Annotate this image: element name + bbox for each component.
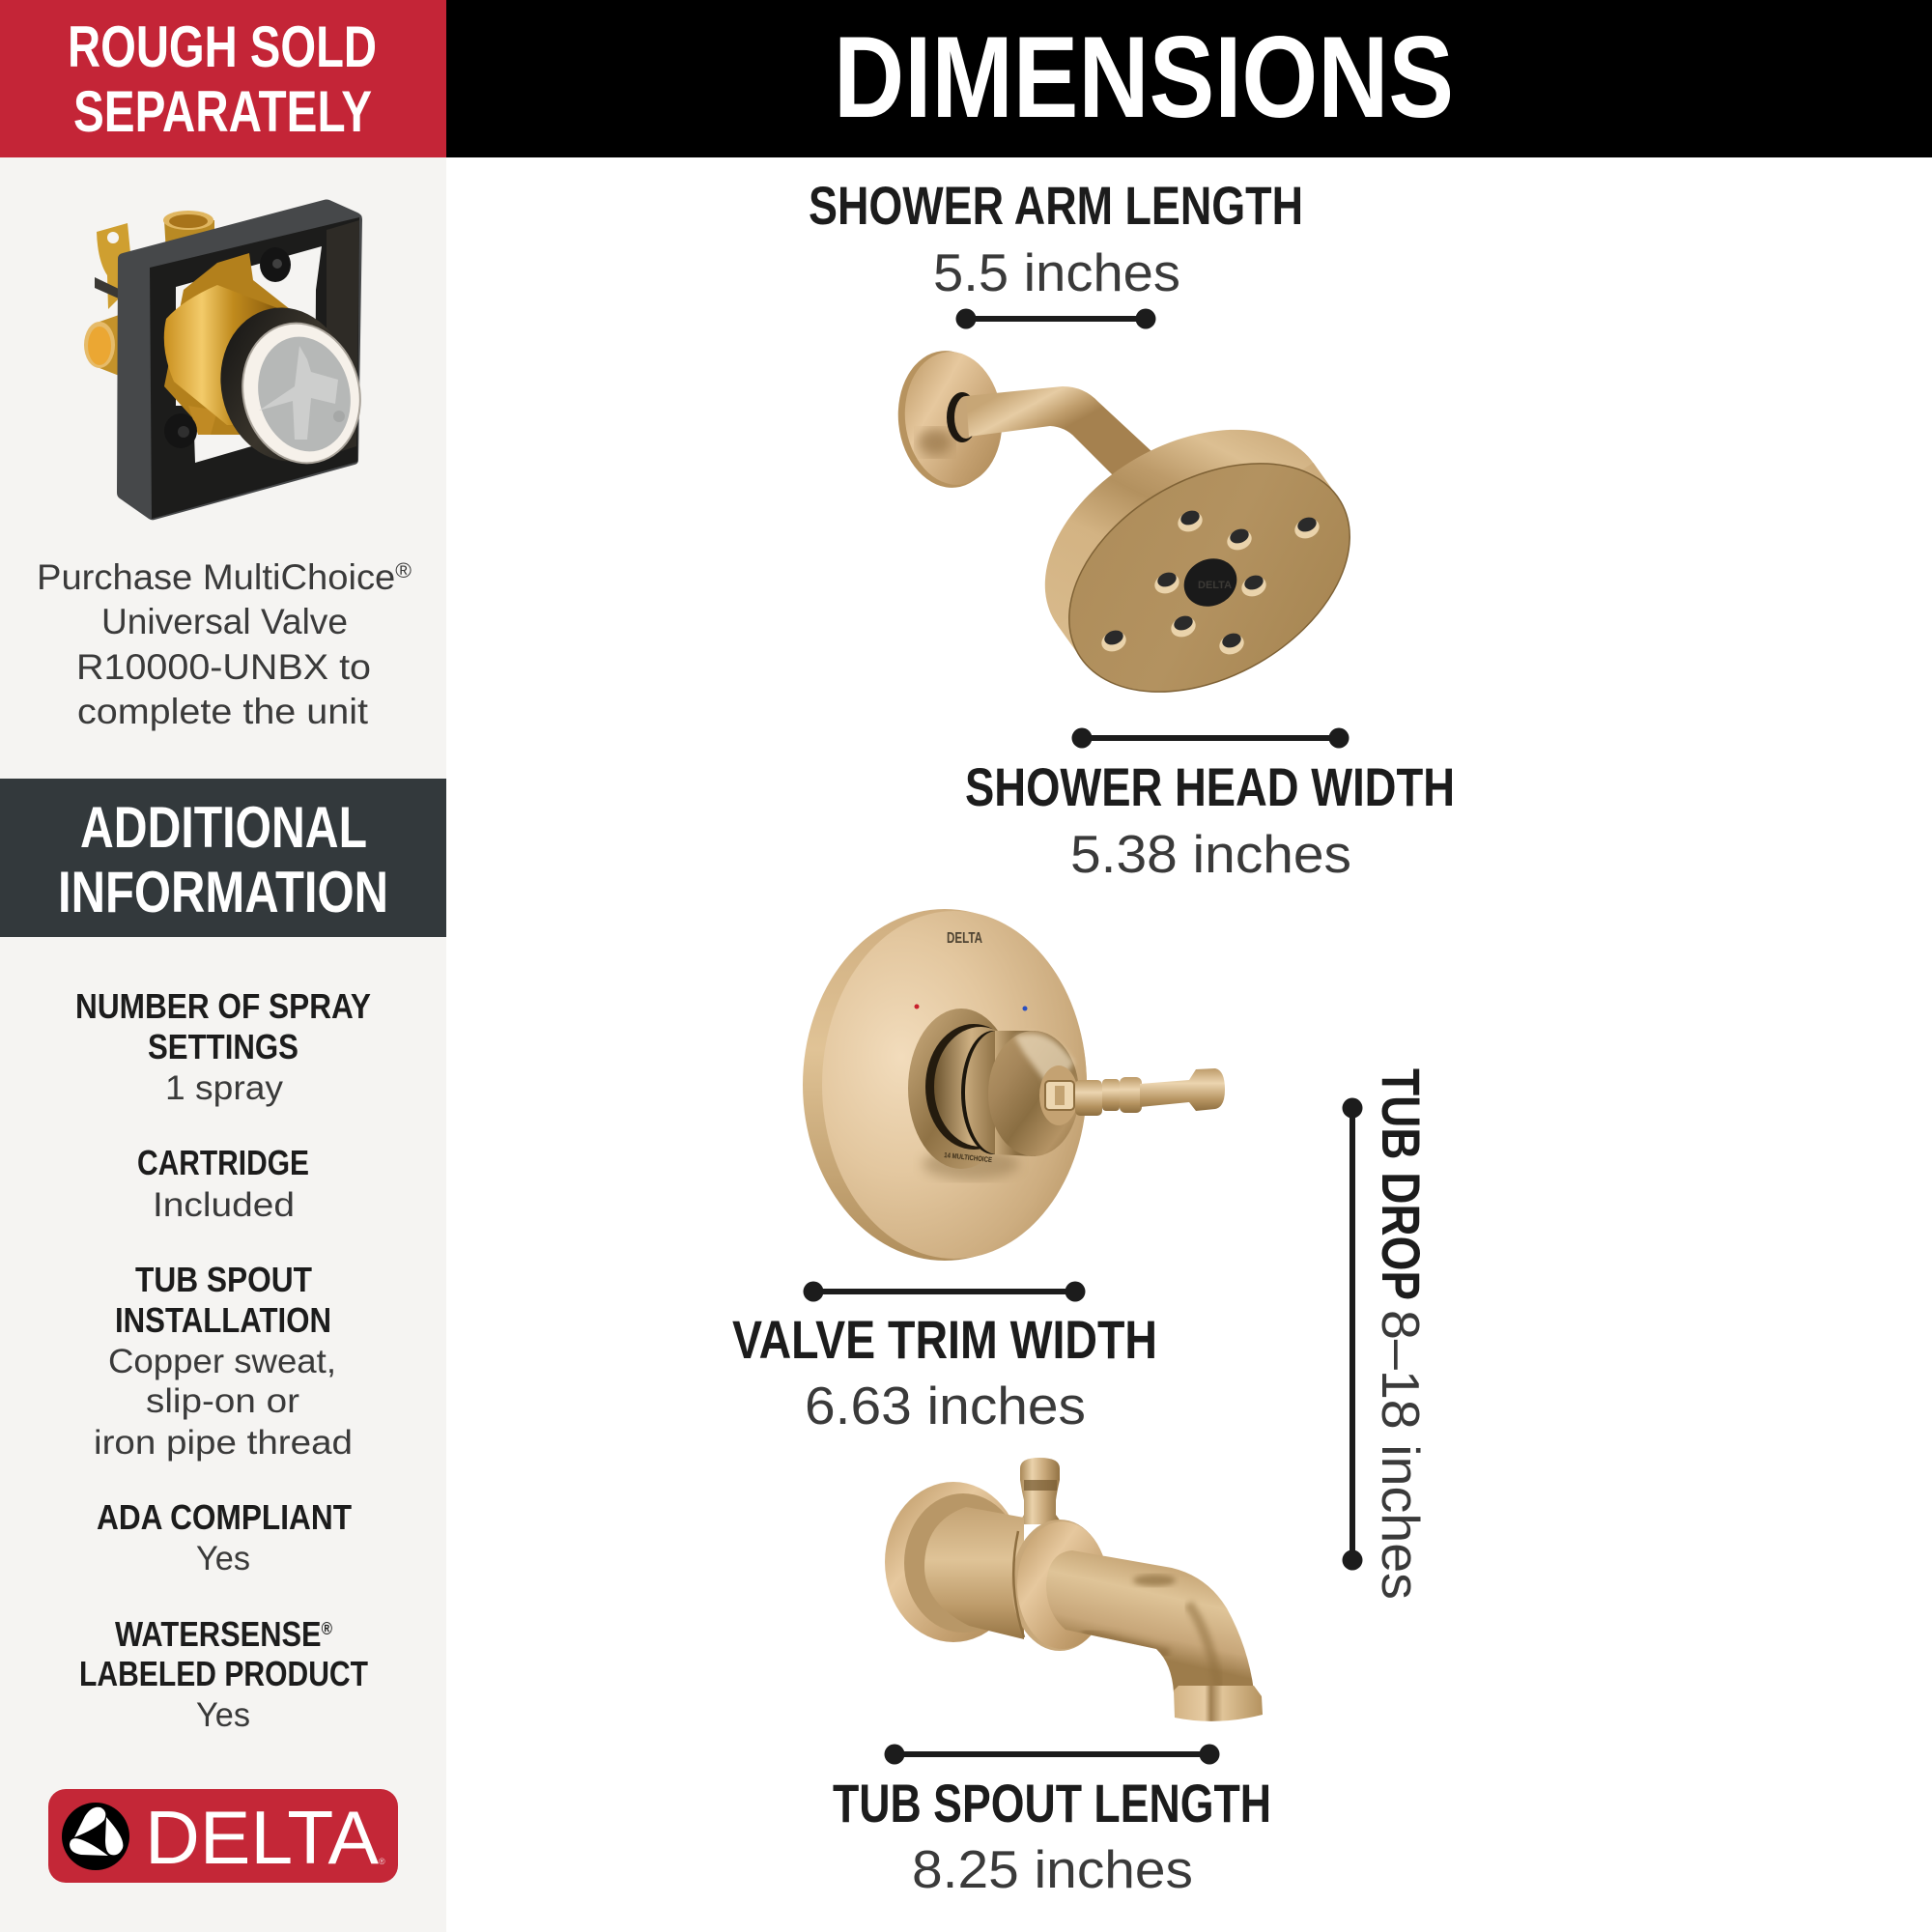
text block: watersense labeled product	[79, 1614, 368, 1734]
lever	[1075, 1080, 1102, 1116]
left pipe	[99, 314, 122, 377]
diverter knob	[1020, 1458, 1061, 1524]
text block: tub spout installation	[94, 1260, 353, 1462]
logo: delta	[48, 1789, 398, 1883]
plastic frame	[117, 199, 362, 520]
text block: tub spout installation: TUB SPOUT	[135, 1260, 312, 1299]
text block: purchase note: ®	[395, 558, 412, 582]
heading: additional information	[0, 779, 446, 937]
text block: watersense labeled product: WATERSENSE	[115, 1614, 355, 1654]
drum back	[1005, 383, 1366, 705]
frame openings	[176, 246, 322, 463]
text block: number of spray settings: SETTINGS	[148, 1027, 298, 1066]
label: shower head width: SHOWER HEAD WIDTH	[965, 756, 1455, 817]
text block: number of spray settings	[75, 986, 371, 1107]
body cylinder	[924, 1507, 1024, 1639]
cap highlight	[1014, 1034, 1074, 1092]
label: valve trim width: 6.63 inches	[805, 1376, 1086, 1435]
panel: sidebar background	[0, 0, 446, 1932]
icon: shower head product	[892, 346, 1390, 739]
handle cylinder	[961, 1031, 1025, 1154]
panel: rough sold separately banner	[0, 0, 446, 157]
label: shower arm length: 5.5 inches	[933, 242, 1180, 302]
hot and cold dots	[914, 1005, 920, 1009]
label: valve trim width	[732, 1309, 1157, 1435]
text block: tub spout installation: INSTALLATION	[115, 1300, 331, 1340]
spray face	[1029, 416, 1390, 739]
spout foot	[1174, 1686, 1263, 1721]
text block: ada compliant: ADA COMPLIANT	[97, 1497, 352, 1537]
dark ring and face	[207, 296, 365, 473]
front collar	[1011, 1520, 1108, 1651]
icon: shower head product: DELTA	[1198, 580, 1232, 591]
text block: watersense labeled product: ®	[322, 1619, 332, 1638]
label: tub spout length: TUB SPOUT LENGTH	[833, 1773, 1271, 1833]
text block: ada compliant: Yes	[196, 1540, 250, 1577]
label: tub drop: TUB DROP	[1371, 1068, 1432, 1300]
label: tub drop	[1371, 1068, 1432, 1600]
heading: additional information: ADDITIONAL	[80, 795, 367, 860]
text block: purchase note	[37, 557, 412, 731]
label: tub drop: 8–18 inches	[1371, 1310, 1431, 1600]
arm	[966, 386, 1152, 480]
label: tub spout length: 8.25 inches	[912, 1839, 1193, 1899]
title: dimensions banner	[446, 0, 1932, 157]
center logo	[1176, 550, 1245, 615]
black screws	[260, 247, 291, 282]
spout shading	[1081, 1573, 1219, 1671]
text block: tub spout installation: iron pipe thread	[94, 1424, 353, 1462]
text block: tub spout installation: Copper sweat,	[108, 1343, 336, 1380]
logo: delta: ®	[379, 1857, 385, 1866]
nozzles	[1098, 508, 1322, 658]
wall flange	[885, 1482, 1022, 1642]
arrow: valve trim dimension line	[804, 1281, 1086, 1302]
logo: delta: DELTA	[145, 1795, 379, 1880]
icon: tub spout product	[885, 1458, 1263, 1721]
text block: watersense labeled product: Yes	[196, 1696, 250, 1734]
arrow: tub spout dimension line	[885, 1745, 1219, 1764]
drum side	[1057, 463, 1337, 659]
text block: number of spray settings: NUMBER OF SPRAY	[75, 986, 371, 1026]
text block: number of spray settings: 1 spray	[165, 1069, 284, 1107]
flange collar	[947, 392, 978, 442]
text block: purchase note: R10000-UNBX to	[76, 647, 371, 687]
plate shadow	[923, 1149, 1019, 1179]
text block: watersense labeled product: LABELED PRODUCT	[79, 1654, 368, 1693]
arrow: tub drop dimension line	[1343, 1097, 1362, 1571]
plate	[803, 909, 1087, 1261]
title: dimensions banner: DIMENSIONS	[834, 13, 1454, 142]
wall flange	[892, 346, 1006, 493]
label: shower arm length	[809, 175, 1303, 302]
brass cylinder	[164, 285, 290, 425]
label: valve trim width: VALVE TRIM WIDTH	[732, 1309, 1157, 1370]
top pipe	[164, 220, 214, 253]
collar engraving: 14 MULTICHOICE	[944, 1151, 992, 1164]
text block: purchase note: Universal Valve	[101, 602, 348, 641]
icon: valve trim product	[803, 909, 1225, 1261]
panel: rough sold separately banner: ROUGH SOLD	[68, 14, 377, 79]
heading: additional information: INFORMATION	[58, 860, 388, 924]
arrow: shower arm dimension line	[956, 309, 1155, 328]
text block: cartridge: Included	[153, 1186, 295, 1224]
label: tub spout length	[833, 1773, 1271, 1899]
handle hub	[1039, 1065, 1078, 1125]
text block: purchase note: complete the unit	[77, 692, 369, 731]
plate logo: DELTA	[947, 930, 982, 947]
label: shower arm length: SHOWER ARM LENGTH	[809, 175, 1303, 236]
spout	[1046, 1550, 1254, 1692]
brass back body	[164, 253, 290, 435]
lower nipple	[188, 406, 217, 435]
text block: cartridge	[137, 1143, 309, 1224]
panel: rough sold separately banner: SEPARATELY	[73, 79, 372, 144]
brass tab	[97, 223, 130, 309]
label: shower head width: 5.38 inches	[1070, 824, 1351, 884]
label: shower head width	[965, 756, 1455, 884]
collar	[908, 1009, 1014, 1169]
text block: ada compliant	[97, 1497, 352, 1577]
icon: rough-in valve product	[84, 199, 375, 520]
arrow: shower head dimension line	[1072, 728, 1349, 748]
text block: cartridge: CARTRIDGE	[137, 1143, 309, 1182]
text block: purchase note: Purchase MultiChoice	[37, 557, 384, 597]
text block: tub spout installation: slip-on or	[146, 1382, 299, 1420]
